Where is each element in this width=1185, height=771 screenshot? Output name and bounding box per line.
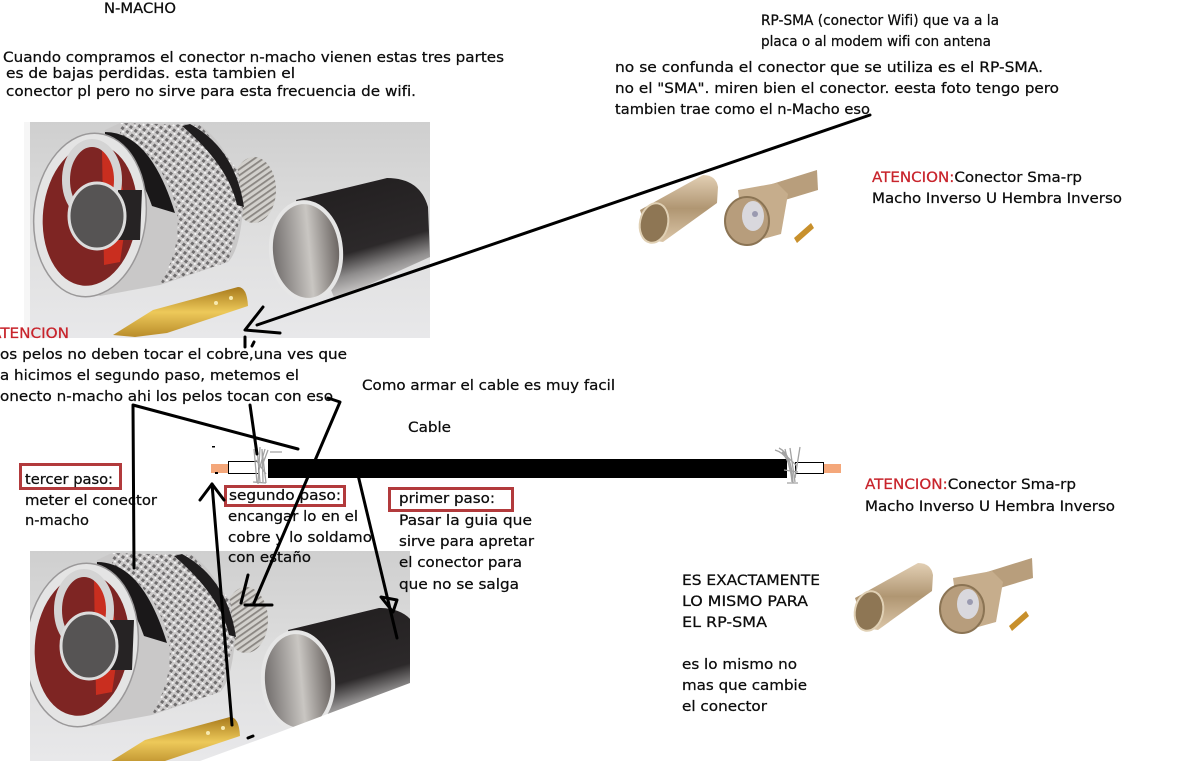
text block: es lo mismo — [682, 657, 807, 715]
photo: RP-SMA connector parts, top — [636, 170, 818, 245]
callout: segundo paso: cobre y lo soldamo — [228, 530, 372, 546]
text block: RP-SMA warning: no se confunda el conector que se utiliza es el RP-SMA. — [615, 60, 1043, 76]
text block: es lo mismo: es lo mismo no — [682, 657, 797, 673]
cable diagram — [211, 446, 841, 484]
text block: intro about the connector: es de bajas perdidas. esta tambien el — [6, 66, 295, 82]
callout: primer paso: primer paso: — [399, 491, 495, 507]
text block: RP-SMA description: placa o al modem wifi con antena — [761, 34, 991, 50]
text block: RP-SMA description: RP-SMA (conector Wifi) que va a la — [761, 13, 999, 29]
callout: primer paso: Pasar la guia que — [399, 513, 532, 529]
callout: atencion RP-SMA, bottom: ATENCION:Conector Sma-rp — [865, 477, 1076, 493]
callout: atencion RP-SMA, bottom: Macho Inverso U Hembra Inverso — [865, 499, 1115, 515]
callout: tercer paso — [20, 464, 157, 529]
text block: intro about the connector: conector pl pero no sirve para esta frecuencia de wifi. — [6, 84, 416, 100]
heading: N-MACHO: N-MACHO — [104, 1, 176, 17]
callout: primer paso: sirve para apretar — [399, 534, 534, 550]
callout: atencion pelos: os pelos no deben tocar el cobre,una ves que — [0, 347, 347, 363]
text block: RP-SMA warning: no el "SMA". miren bien el conector. eesta foto tengo pero — [615, 81, 1059, 97]
arrow: tercer paso to connector body — [133, 405, 298, 568]
text block: exactamente lo mismo: LO MISMO PARA — [682, 594, 808, 610]
callout: segundo paso: con estaño — [228, 550, 311, 566]
text block: es lo mismo: mas que cambie — [682, 678, 807, 694]
arrow: hairs line — [250, 405, 257, 454]
callout: primer paso: el conector para — [399, 555, 522, 571]
callout: atencion RP-SMA, top: ATENCION:Conector Sma-rp — [872, 170, 1082, 186]
callout: segundo paso: encangar lo en el — [228, 509, 358, 525]
text block: RP-SMA warning: tambien trae como el n-Macho eso — [615, 102, 870, 118]
text block: exactamente lo mismo: ES EXACTAMENTE — [682, 573, 820, 589]
callout: primer paso: que no se salga — [399, 577, 519, 593]
callout: primer paso — [390, 488, 534, 593]
text block: es lo mismo: el conector — [682, 699, 767, 715]
callout: tercer paso: tercer paso: — [25, 472, 113, 488]
callout: atencion RP-SMA, top: Macho Inverso U Hembra Inverso — [872, 191, 1122, 207]
photo: N-macho connector parts — [24, 122, 430, 338]
arrow: copper tip to gold pin — [200, 484, 253, 738]
heading: como armar el cable: Como armar el cable es muy facil — [362, 378, 615, 394]
photo: RP-SMA connector parts, bottom — [851, 558, 1033, 633]
callout: atencion pelos — [0, 326, 347, 405]
callout: atencion RP-SMA, top — [872, 170, 1122, 207]
text block: exactamente lo mismo — [682, 573, 820, 631]
callout: segundo paso: segundo paso: — [229, 488, 341, 504]
arrow: segundo paso to connector nut — [241, 398, 340, 605]
text block: RP-SMA warning — [615, 60, 1059, 118]
callout: tercer paso: n-macho — [25, 513, 89, 529]
callout: tercer paso: meter el conector — [25, 493, 157, 509]
text block: intro about the connector: Cuando compramos el conector n-macho vienen estas tres partes — [3, 50, 504, 66]
text block: RP-SMA description — [761, 13, 999, 50]
photo: N-macho connector parts, lower — [30, 551, 410, 761]
label: cable: Cable — [408, 420, 451, 436]
callout: atencion pelos: a hicimos el segundo paso, metemos el — [0, 368, 299, 384]
arrow: from RP-SMA text to pelos — [245, 115, 870, 347]
text block: intro about the connector — [3, 50, 504, 100]
callout: atencion RP-SMA, bottom — [865, 477, 1115, 515]
text block: exactamente lo mismo: EL RP-SMA — [682, 615, 767, 631]
arrow: primer paso to ferrule — [358, 475, 397, 638]
callout: segundo paso — [226, 486, 372, 566]
callout: atencion pelos: onecto n-macho ahi los pelos tocan con eso — [0, 389, 333, 405]
